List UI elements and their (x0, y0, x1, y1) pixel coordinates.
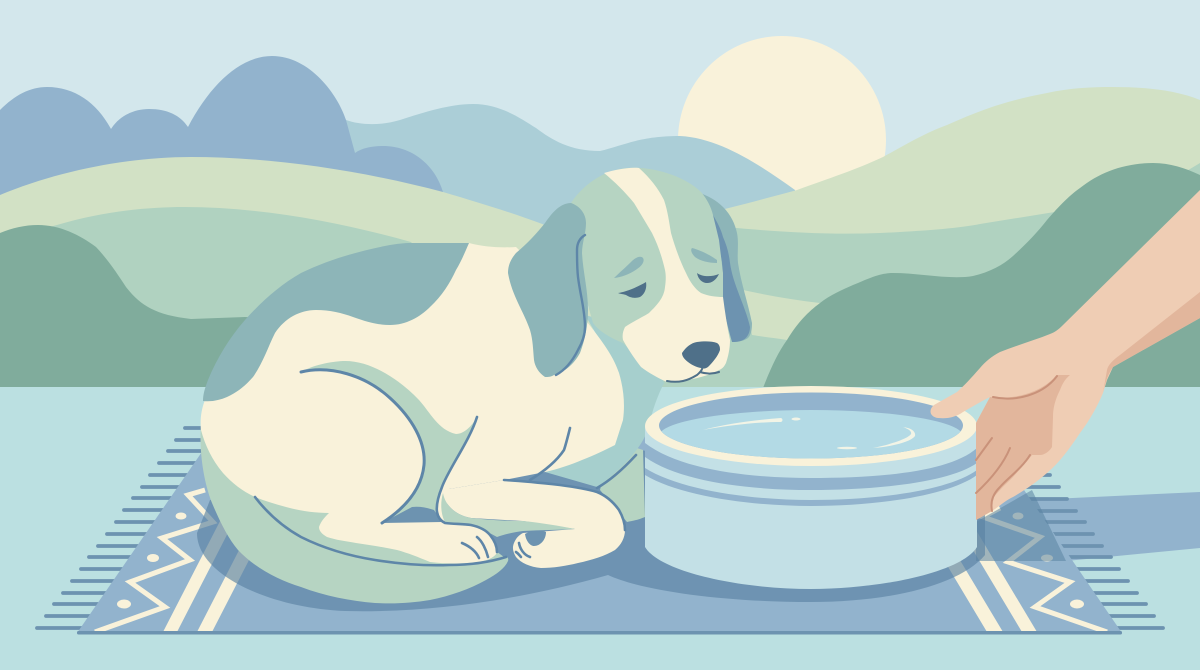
rug fringe (37, 428, 1163, 628)
dog: near ear line (556, 235, 585, 375)
bowl: inner wall (659, 392, 963, 458)
dog: far ear inner (713, 215, 750, 342)
hills: mid green left (0, 207, 460, 340)
dog: green strip between legs (441, 493, 575, 537)
dog: front leg top line (504, 480, 625, 530)
dog: right eyebrow (691, 248, 717, 263)
rug: right dots (1012, 512, 1084, 608)
dog: front leg (443, 480, 625, 568)
dog: near ear (508, 203, 588, 377)
hand: finger lines (976, 438, 1030, 511)
dog: right closed eye (697, 273, 719, 283)
dog: cream body (201, 243, 624, 564)
dog (200, 168, 752, 603)
bowl: body (645, 426, 977, 589)
dog: front paw toe spot (525, 531, 546, 546)
hills: pale blue middle (300, 104, 810, 300)
hand: forearm shading (1103, 292, 1200, 393)
bowl: thin blue band (645, 468, 977, 506)
rug: left zigzag (95, 490, 213, 632)
dog: mouth (667, 369, 719, 382)
dog: outline strokes (255, 370, 636, 565)
dog: front paw toes (516, 543, 530, 557)
dog: hip line (301, 370, 424, 523)
hills: light green left (0, 157, 600, 330)
bowl: water highlights (703, 418, 915, 449)
rug: right stripes (908, 500, 1037, 632)
hand: arm and palm (931, 190, 1200, 520)
dog: green behind chest (600, 440, 645, 522)
shadow on the ground to the right (1030, 492, 1200, 561)
dog: right chest line (597, 455, 636, 488)
hand reaching toward bowl (931, 190, 1200, 520)
hills: dark green left (0, 225, 300, 388)
dog: cream face blaze and muzzle (604, 168, 730, 382)
dog: hind paw toes (462, 537, 488, 558)
rug: left stripes (163, 490, 285, 632)
hills: blue background (0, 56, 443, 260)
shadow under dog and bowl (197, 450, 985, 611)
dog: left eyebrow (614, 257, 644, 278)
dog: tail line (255, 497, 506, 565)
hills: light band (743, 290, 830, 340)
rug: bottom edge (77, 631, 1122, 634)
water bowl (645, 386, 977, 589)
rug (77, 433, 1122, 634)
rug: right zigzag (983, 508, 1107, 632)
hills: dark green right (763, 163, 1200, 388)
hand: shaded fingers (976, 375, 1070, 520)
shadow across the rug on the right (976, 490, 1066, 561)
dog: green underside and tail (200, 423, 508, 603)
dog: head (571, 168, 723, 370)
dog: far ear (700, 193, 752, 342)
dog: green haunch sliver (301, 361, 477, 523)
bowl: wide blue band (645, 443, 977, 490)
bowl: rim (645, 386, 977, 466)
dog: chest line (530, 428, 570, 480)
dog: left closed eye (618, 282, 646, 298)
hills: light green right (700, 87, 1200, 300)
hills: mid green right (650, 163, 1200, 390)
rug: left dots (117, 512, 186, 608)
sun (678, 36, 886, 244)
dog: nose (682, 341, 720, 369)
dog: chest shadow (545, 315, 664, 487)
bowl: water (659, 410, 963, 462)
dog: haunch to hind paw line (437, 417, 497, 552)
dog: floor gap between legs (382, 507, 442, 523)
dog: teal back patch (203, 243, 469, 401)
hand: palm crease (993, 376, 1057, 399)
ground (0, 387, 1200, 670)
